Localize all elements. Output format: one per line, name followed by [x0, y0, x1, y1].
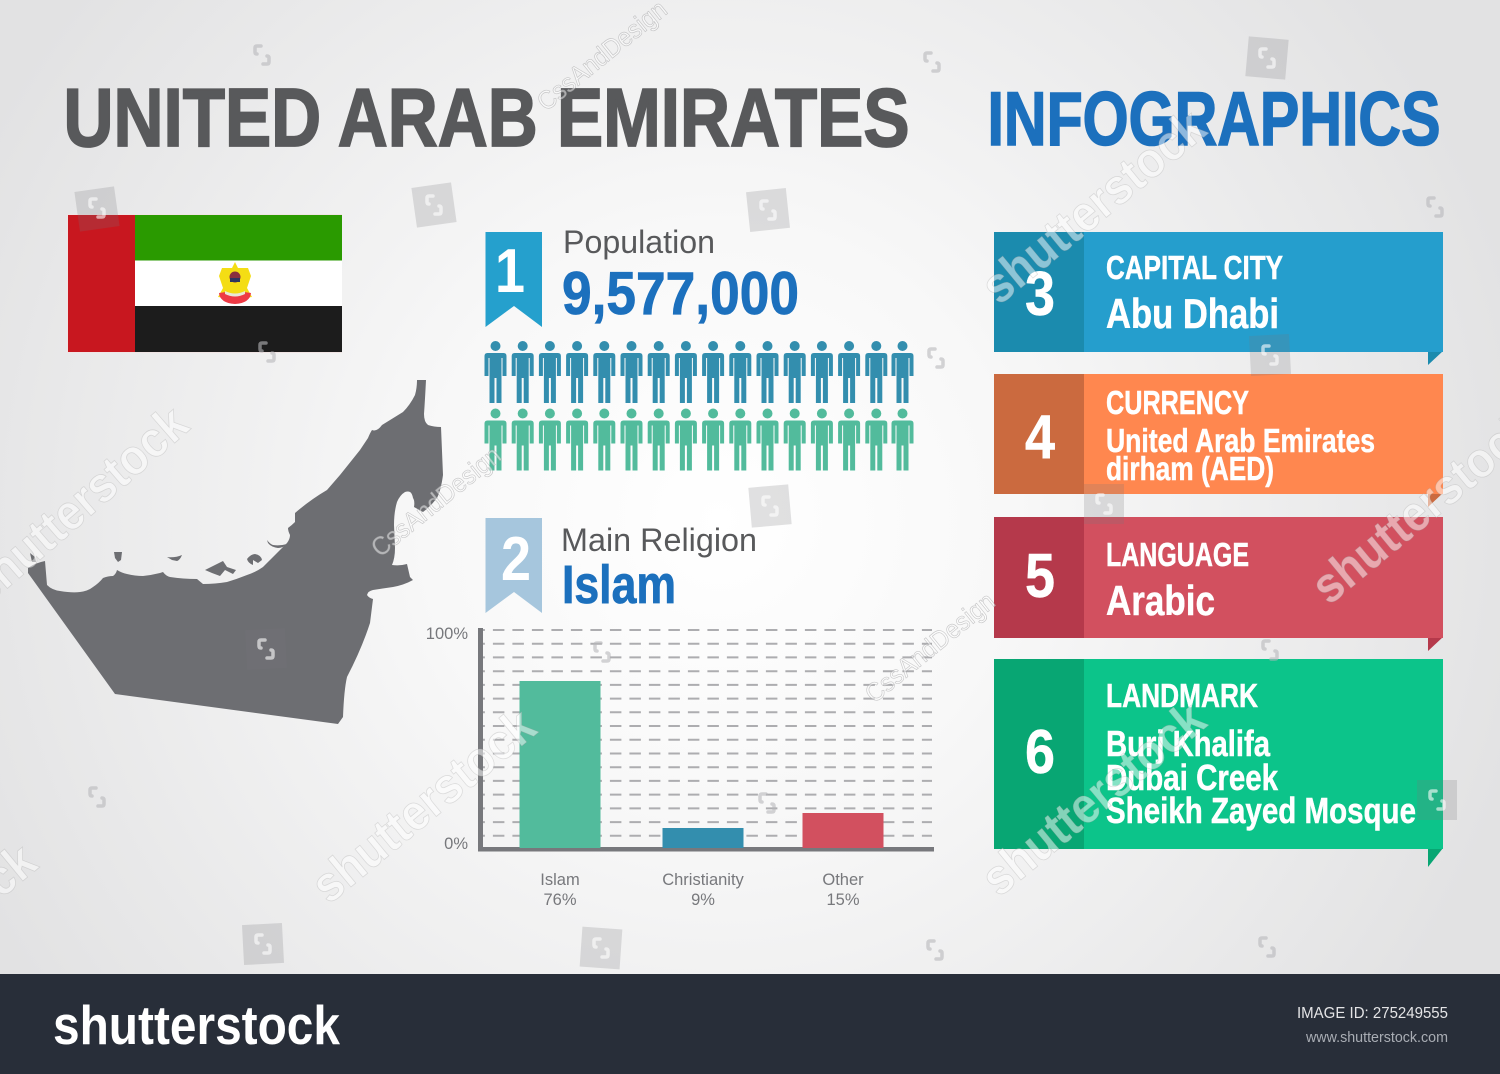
- bar: Christianity: [662, 828, 744, 848]
- image id: IMAGE ID: 275249555: [1297, 1005, 1448, 1022]
- ribbon badge 1: [486, 232, 542, 327]
- axis labels: Christianity: [662, 871, 745, 889]
- watermark text: shutterstock: [970, 690, 1216, 906]
- bar: Other: [802, 813, 884, 848]
- card 6: landmark: LANDMARK: [1106, 677, 1258, 714]
- axis labels: 15%: [826, 891, 860, 909]
- card 3: capital city: 3: [1025, 260, 1055, 329]
- pictogram row: blue people: [484, 341, 914, 403]
- card 4: currency: dirham (AED): [1106, 450, 1274, 487]
- card 3: capital city: Abu Dhabi: [1106, 290, 1279, 337]
- card 6: landmark: Burj Khalifa: [1106, 723, 1271, 764]
- icon: emblem: [218, 262, 252, 304]
- pictogram row: green people: [484, 408, 914, 470]
- card 5: language: Arabic: [1106, 577, 1215, 624]
- card 6: landmark: Dubai Creek: [1106, 757, 1279, 798]
- label: main religion: Main Religion: [561, 522, 757, 558]
- watermark text: shutterstock: [970, 98, 1216, 314]
- watermark text: shutterstock: [300, 697, 546, 913]
- heading: United Arab Emirates: UNITED ARAB EMIRATES: [64, 71, 910, 164]
- axis labels: 76%: [543, 891, 577, 909]
- bar: Islam: [520, 681, 600, 848]
- card 3: capital city: CAPITAL CITY: [1106, 249, 1283, 286]
- card 5: language: LANGUAGE: [1106, 536, 1249, 573]
- panel: population: [484, 224, 914, 470]
- watermark text: CssAndDesign: [859, 586, 1001, 709]
- islands: [114, 552, 122, 562]
- value: religion: Islam: [562, 555, 676, 615]
- axis labels: [426, 625, 864, 909]
- card 4: currency: [994, 374, 1443, 507]
- card 3: capital city: [994, 232, 1443, 365]
- ribbon badge 2: [486, 518, 542, 613]
- website: www.shutterstock.com: [1305, 1030, 1448, 1046]
- value: population: 9,577,000: [562, 260, 799, 327]
- card 4: currency: CURRENCY: [1106, 384, 1249, 421]
- bar chart: [426, 625, 934, 909]
- axis labels: 0%: [444, 835, 468, 853]
- title: [64, 71, 1440, 164]
- map of the UAE: [28, 380, 443, 724]
- flag of the UAE: [67, 214, 342, 353]
- footer bar: [0, 974, 1500, 1074]
- card 5: language: [994, 517, 1443, 651]
- axis labels: Islam: [540, 871, 580, 889]
- ribbon badge 1: 1: [495, 237, 525, 306]
- card 6: landmark: [994, 659, 1443, 867]
- axis labels: 9%: [691, 891, 715, 909]
- ribbon badge 2: 2: [501, 525, 531, 594]
- card 6: landmark: Sheikh Zayed Mosque: [1106, 790, 1416, 831]
- watermark text: CssAndDesign: [365, 440, 507, 563]
- label: population: Population: [563, 224, 715, 260]
- axis labels: 100%: [426, 625, 468, 643]
- card 6: landmark: 6: [1025, 718, 1055, 787]
- card 5: language: 5: [1025, 542, 1055, 611]
- footer logo: shutterstock: [53, 994, 340, 1056]
- axis labels: Other: [822, 871, 864, 889]
- panel: main religion: [426, 518, 934, 909]
- card 4: currency: 4: [1025, 403, 1055, 472]
- card 4: currency: United Arab Emirates: [1106, 422, 1375, 459]
